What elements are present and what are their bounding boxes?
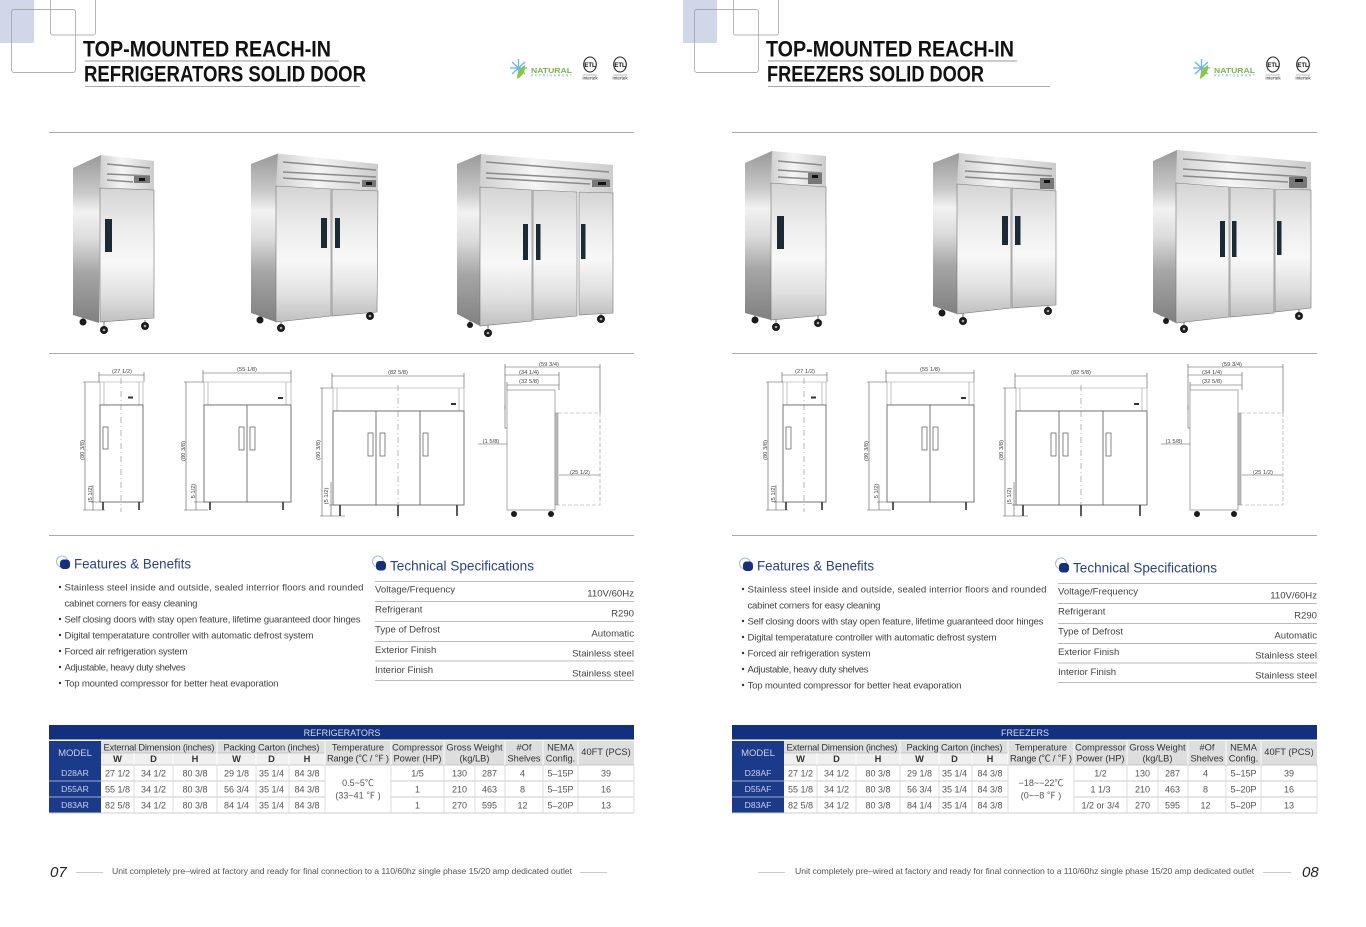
product photo: two-door refrigerator: [251, 154, 378, 332]
table header: External Dimension (inches): [104, 742, 214, 752]
table rows: 130: [452, 768, 467, 778]
table rows: 34 1/2: [141, 800, 166, 810]
table header: Power (HP): [393, 754, 442, 764]
table header: Range (℃ / ℉ ): [327, 754, 389, 764]
dimension drawing: two door front: 5 1/2): [191, 484, 197, 498]
header decoration squares: [0, 0, 96, 72]
feature list: Forced air refrigeration system: [64, 646, 188, 658]
table rows: 270: [452, 800, 467, 810]
icon: ETL mark: ETL: [1297, 63, 1309, 69]
dimension drawing: two door front: [864, 367, 974, 510]
icon: specifications heading: [1056, 558, 1069, 572]
table title bar: REFRIGERATORS: [304, 728, 380, 738]
title: [83, 36, 366, 86]
table rows: 1/2 or 3/4: [1081, 800, 1120, 810]
table rows: 84 3/8: [294, 800, 320, 810]
spec table: Type of Defrost: [375, 624, 440, 636]
table rows: 13: [1284, 800, 1294, 810]
footer: Unit completely pre–wired at factory and ready for final connection to a 110/60hz single phase 15/20 amp dedicated outlet: [795, 866, 1255, 876]
table header: D: [951, 754, 958, 764]
spec table: Interior Finish: [1058, 667, 1116, 678]
dimension drawing: three door front: [999, 370, 1147, 518]
table rows: 29 1/8: [224, 768, 249, 778]
table rows: 12: [1200, 800, 1211, 810]
spec table: Automatic: [1274, 630, 1317, 642]
spec table: Refrigerant: [375, 604, 423, 616]
spec table: Stainless steel: [572, 668, 634, 680]
dimension drawing: side view: (34 1/4): [1202, 370, 1222, 376]
table rows: 35 1/4: [942, 800, 967, 810]
dimension drawing: side view: (25 1/2): [1253, 470, 1273, 476]
heading: Technical Specifications: [1073, 560, 1217, 576]
dimension drawing: side view: (34 1/4): [519, 370, 539, 376]
table rows: 34 1/2: [141, 784, 166, 794]
spec table: Type of Defrost: [1058, 626, 1123, 638]
table rows: 210: [452, 784, 467, 794]
feature list: cabinet corners for easy cleaning: [64, 598, 198, 610]
table rows: 84 3/8: [294, 768, 320, 778]
page 07: refrigerators: [0, 0, 634, 881]
table header: Range (℃ / ℉ ): [1010, 754, 1072, 764]
table rows: 8: [520, 784, 525, 794]
dimension drawing: one door front: (5 1/2): [88, 486, 94, 502]
icon: ETL mark: Intertek: [1265, 76, 1281, 80]
dimension drawing: side view: (32 5/8): [519, 379, 539, 385]
dimension drawing: two door front: (55 1/8): [920, 367, 940, 373]
spec table: R290: [1294, 610, 1317, 622]
table rows: 1 1/3: [1090, 784, 1111, 794]
natural refrigerant wordmark: [531, 66, 573, 78]
header decoration squares: [683, 0, 778, 72]
table header: W: [915, 754, 924, 764]
table rows: 39: [1284, 768, 1294, 778]
table rows: 12: [517, 800, 528, 810]
table header: Packing Carton (inches): [906, 742, 1002, 752]
table rows: D28AR: [61, 768, 89, 778]
table header: Shelves: [1190, 754, 1224, 764]
natural refrigerant wordmark: REFRIGERANT: [1214, 74, 1256, 78]
feature list: [742, 584, 1046, 692]
table rows: [732, 765, 1317, 813]
table rows: 463: [1165, 784, 1180, 794]
certification logos: [1193, 57, 1311, 80]
dimension drawing: side view: (59 3/4): [539, 362, 559, 368]
icon: ETL mark: ETL: [584, 63, 596, 69]
table rows: 35 1/4: [942, 768, 967, 778]
feature list: Adjustable, heavy duty shelves: [64, 662, 186, 674]
feature list: Adjustable, heavy duty shelves: [748, 664, 869, 676]
table rows: 39: [601, 768, 611, 778]
spec table: Stainless steel: [572, 648, 634, 660]
table rows: 130: [1135, 768, 1150, 778]
spec table: Voltage/Frequency: [1058, 586, 1138, 598]
table rows: 82 5/8: [105, 800, 130, 810]
table header: (kg/LB): [1143, 754, 1172, 764]
dimension drawing: three door front: (82 5/8): [388, 370, 408, 376]
feature list: Stainless steel inside and outside, sealed interrior floors and rounded: [748, 584, 1046, 596]
icon: ETL mark: ETL: [614, 63, 626, 69]
dimension drawing: side view: (25 1/2): [570, 470, 590, 476]
table rows: 80 3/8: [865, 800, 891, 810]
dimension drawing: one door front: (27 1/2): [112, 369, 132, 375]
icon: ETL mark: [612, 57, 628, 80]
spec table: [375, 582, 634, 680]
table rows: D28AF: [745, 768, 771, 778]
table rows: 1/2: [1094, 768, 1107, 778]
table title bar: FREEZERS: [1001, 728, 1049, 738]
spec table: Interior Finish: [375, 665, 433, 676]
product photo: three-door freezer: [1153, 150, 1311, 333]
dimension drawing: two door front: (55 1/8): [237, 367, 257, 373]
panel: features and benefits: [56, 556, 364, 690]
dimension drawing: three door front: [316, 370, 464, 518]
table rows: 29 1/8: [907, 768, 932, 778]
spec table: R290: [611, 608, 634, 620]
icon: ETL mark: Intertek: [1295, 76, 1311, 80]
table rows: 34 1/2: [141, 768, 166, 778]
feature list: Stainless steel inside and outside, sealed interrior floors and rounded: [64, 582, 364, 594]
table rows: 55 1/8: [788, 784, 813, 794]
spec table: 110V/60Hz: [587, 588, 634, 600]
table rows: 35 1/4: [259, 768, 284, 778]
table header: W: [113, 754, 122, 764]
dimension drawing: three door front: (5 1/2): [324, 488, 330, 504]
table rows: 27 1/2: [105, 768, 130, 778]
footer: [758, 864, 1319, 881]
spec table: Exterior Finish: [375, 645, 436, 656]
table rows: 595: [482, 800, 497, 810]
table header: NEMA: [547, 742, 575, 752]
footer: 07: [50, 864, 67, 881]
panel: technical specifications: [1056, 558, 1317, 682]
dimension drawing: one door front: (80 3/8): [763, 440, 769, 460]
icon: features heading: [56, 556, 70, 569]
table rows: D55AF: [745, 784, 771, 794]
table rows: 34 1/2: [824, 784, 849, 794]
dimension drawing: side view: [1161, 362, 1283, 517]
spec table: Refrigerant: [1058, 606, 1106, 618]
table rows: 35 1/4: [259, 784, 284, 794]
table rows: 80 3/8: [182, 768, 208, 778]
dimension drawing: side view: (1 5/8): [483, 439, 499, 445]
icon: ETL mark: [1295, 57, 1311, 80]
table rows: D55AR: [61, 784, 89, 794]
table rows: 16: [601, 784, 611, 794]
feature list: Digital temperatature controller with automatic defrost system: [748, 632, 996, 644]
dimension drawing: one door front: (80 3/8): [80, 440, 86, 460]
table rows: 84 3/8: [977, 800, 1003, 810]
product photo: one-door freezer: [745, 151, 826, 331]
table rows: 4: [1203, 768, 1208, 778]
table header: Config.: [546, 754, 575, 764]
icon: ETL mark: [582, 57, 598, 80]
dimension drawing: three door front: (5 1/2): [1007, 488, 1013, 504]
dimension drawing: side view: (59 3/4): [1222, 362, 1242, 368]
table rows: 56 3/4: [907, 784, 932, 794]
table rows: 270: [1135, 800, 1150, 810]
spec table: Exterior Finish: [1058, 647, 1119, 658]
panel: features and benefits: [740, 558, 1046, 692]
icon: ETL mark: [1265, 57, 1281, 80]
spec table: Automatic: [591, 628, 634, 640]
footer: [50, 864, 607, 881]
feature list: Top mounted compressor for better heat evaporation: [64, 678, 278, 690]
title: TOP-MOUNTED REACH-IN: [766, 36, 1014, 62]
product photo: two-door freezer: [933, 153, 1056, 325]
table rows: 5–20P: [547, 800, 574, 810]
table rows: 210: [1135, 784, 1150, 794]
table header: [732, 741, 1317, 765]
product photo: one-door refrigerator: [73, 155, 154, 334]
feature list: Top mounted compressor for better heat evaporation: [748, 680, 962, 692]
spec table: [1058, 584, 1317, 682]
natural refrigerant wordmark: NATURAL: [1214, 66, 1255, 75]
feature list: [59, 582, 364, 690]
feature list: Self closing doors with stay open feature, lifetime guaranteed door hinges: [748, 616, 1044, 628]
table header: MODEL: [58, 748, 92, 759]
title: FREEZERS SOLID DOOR: [767, 62, 984, 86]
table rows: 5–15P: [1230, 768, 1257, 778]
dimension drawing: side view: [478, 362, 600, 517]
table header: Config.: [1229, 754, 1258, 764]
icon: natural refrigerant snowflake: [510, 59, 527, 79]
dimension drawing: one door front: (5 1/2): [771, 486, 777, 502]
table header: H: [875, 754, 882, 764]
page 08: freezers: [683, 0, 1319, 881]
natural refrigerant wordmark: REFRIGERANT: [531, 74, 573, 78]
table header: External Dimension (inches): [786, 742, 898, 752]
table header: 40FT (PCS): [1264, 747, 1314, 757]
icon: natural refrigerant snowflake: [1193, 59, 1210, 79]
table header: Compressor: [392, 742, 443, 752]
table rows: 35 1/4: [259, 800, 284, 810]
heading: Features & Benefits: [74, 556, 191, 572]
dimension drawing: two door front: [181, 367, 291, 510]
dimension drawing: one door front: [80, 369, 144, 512]
table header: [49, 741, 634, 765]
table header: W: [232, 754, 241, 764]
table header: Temperature: [332, 742, 384, 752]
icon: specifications heading: [372, 556, 386, 570]
heading: Technical Specifications: [390, 558, 534, 574]
icon: features heading: [740, 558, 753, 571]
table header: D: [268, 754, 275, 764]
table rows: 80 3/8: [865, 768, 891, 778]
table rows: 84 3/8: [294, 784, 320, 794]
table header: NEMA: [1230, 742, 1258, 752]
table rows: 80 3/8: [182, 800, 208, 810]
table header: MODEL: [741, 748, 775, 759]
table rows: 34 1/2: [824, 800, 849, 810]
table header: Temperature: [1015, 742, 1067, 752]
table header: Gross Weight: [1129, 742, 1186, 752]
dimension drawing: side view: (32 5/8): [1202, 379, 1222, 385]
dimension drawing: one door front: (27 1/2): [795, 369, 815, 375]
table rows: −18~−22℃: [1019, 778, 1063, 788]
table rows: 5–20P: [1230, 800, 1257, 810]
dimension drawing: three door front: (80 3/8): [999, 440, 1005, 460]
table: refrigerators: [49, 725, 634, 813]
table rows: 84 1/4: [907, 800, 932, 810]
table rows: 0.5~5℃: [342, 778, 374, 788]
dimension drawing: side view: (1 5/8): [1166, 439, 1182, 445]
table title bar: [49, 725, 634, 740]
icon: ETL mark: Intertek: [582, 76, 598, 80]
table header: Power (HP): [1076, 754, 1125, 764]
table rows: 34 1/2: [824, 768, 849, 778]
product photo: three-door refrigerator: [457, 154, 613, 337]
table rows: 5–15P: [547, 768, 574, 778]
heading: Features & Benefits: [757, 558, 874, 574]
icon: ETL mark: Intertek: [612, 76, 628, 80]
table rows: [49, 765, 634, 813]
spec table: 110V/60Hz: [1270, 590, 1317, 602]
table header: W: [796, 754, 805, 764]
table header: #Of: [516, 742, 532, 752]
footer: Unit completely pre–wired at factory and ready for final connection to a 110/60hz single phase 15/20 amp dedicated outlet: [112, 866, 573, 876]
title: [766, 36, 1050, 86]
title: TOP-MOUNTED REACH-IN: [83, 36, 331, 62]
table rows: 55 1/8: [105, 784, 130, 794]
table header: #Of: [1200, 742, 1215, 752]
table rows: 56 3/4: [224, 784, 249, 794]
table rows: 84 1/4: [224, 800, 249, 810]
table header: (kg/LB): [460, 754, 489, 764]
dimension drawing: two door front: 5 1/2): [874, 484, 880, 498]
table rows: 463: [482, 784, 497, 794]
table rows: D83AF: [745, 800, 771, 810]
spec table: Voltage/Frequency: [375, 584, 455, 596]
table header: Gross Weight: [446, 742, 503, 752]
feature list: cabinet corners for easy cleaning: [748, 600, 880, 612]
table rows: 5–20P: [1230, 784, 1257, 794]
dimension drawing: one door front: [763, 369, 827, 512]
table rows: 287: [1165, 768, 1180, 778]
table rows: D83AR: [61, 800, 89, 810]
table rows: 82 5/8: [788, 800, 813, 810]
table rows: 595: [1165, 800, 1180, 810]
table rows: 16: [1284, 784, 1294, 794]
table rows: 84 3/8: [977, 784, 1003, 794]
table: freezers: [732, 725, 1317, 813]
table header: H: [987, 754, 994, 764]
table header: Packing Carton (inches): [224, 742, 320, 752]
icon: ETL mark: ETL: [1267, 63, 1279, 69]
table rows: 84 3/8: [977, 768, 1003, 778]
natural refrigerant wordmark: [1214, 66, 1256, 78]
table rows: (0~−8 ℉ ): [1021, 790, 1061, 800]
table rows: 287: [482, 768, 497, 778]
table title bar: [732, 725, 1317, 740]
table header: H: [192, 754, 199, 764]
certification logos: [510, 57, 628, 80]
table rows: 13: [601, 800, 611, 810]
table rows: 1: [415, 784, 420, 794]
table header: H: [304, 754, 311, 764]
feature list: Self closing doors with stay open feature, lifetime guaranteed door hinges: [64, 614, 361, 626]
natural refrigerant wordmark: NATURAL: [531, 66, 572, 75]
spec table: Stainless steel: [1255, 670, 1317, 682]
table rows: 1: [415, 800, 420, 810]
table header: Compressor: [1075, 742, 1126, 752]
panel: technical specifications: [372, 556, 634, 680]
table header: 40FT (PCS): [581, 747, 631, 757]
table rows: 8: [1203, 784, 1208, 794]
table rows: 80 3/8: [865, 784, 891, 794]
table header: D: [150, 754, 157, 764]
dimension drawing: two door front: (80 3/8): [864, 441, 870, 461]
table rows: 5–15P: [547, 784, 574, 794]
table header: Shelves: [507, 754, 541, 764]
dimension drawing: three door front: (80 3/8): [316, 440, 322, 460]
table rows: 80 3/8: [182, 784, 208, 794]
feature list: Digital temperatature controller with automatic defrost system: [64, 630, 314, 642]
table rows: 4: [520, 768, 525, 778]
spec table: Stainless steel: [1255, 650, 1317, 662]
table rows: 27 1/2: [788, 768, 813, 778]
footer: 08: [1302, 864, 1319, 881]
dimension drawing: three door front: (82 5/8): [1071, 370, 1091, 376]
table rows: 1/5: [411, 768, 424, 778]
dimension drawing: two door front: (80 3/8): [181, 441, 187, 461]
table rows: (33~41 ℉ ): [335, 790, 381, 800]
title: REFRIGERATORS SOLID DOOR: [84, 62, 366, 86]
table rows: 35 1/4: [942, 784, 967, 794]
feature list: Forced air refrigeration system: [748, 648, 870, 660]
table header: D: [833, 754, 840, 764]
